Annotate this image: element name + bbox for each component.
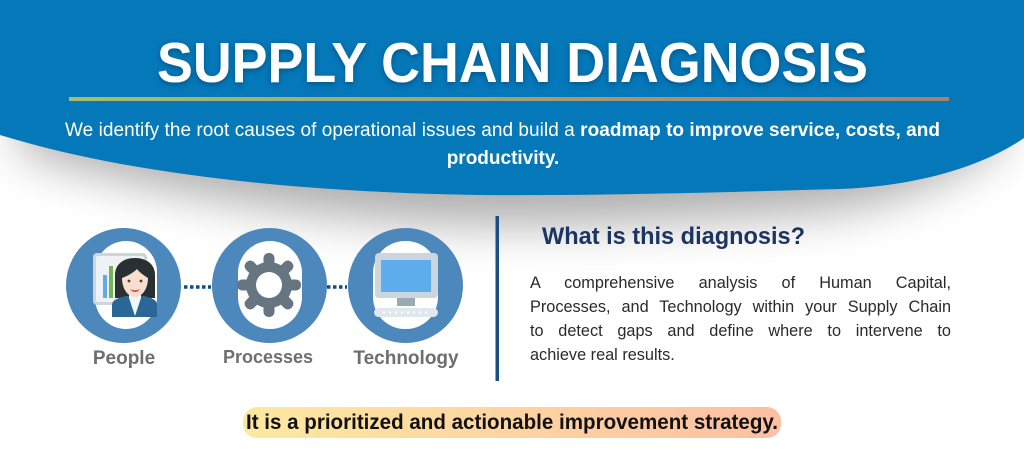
body text: achieve real results. <box>530 346 675 364</box>
people label: People <box>93 348 155 369</box>
technology label: Technology <box>353 348 459 369</box>
title rule <box>69 97 949 101</box>
subtitle <box>65 120 940 169</box>
processes icon <box>212 228 327 343</box>
body text: Processes, and Technology within your Supply Chain <box>530 298 951 316</box>
header banner <box>0 0 1024 195</box>
processes label: Processes <box>223 347 313 367</box>
callout pill: It is a prioritized and actionable improvement strategy. <box>246 411 778 434</box>
technology icon <box>348 228 463 343</box>
body text: to detect gaps and define where to intervene to <box>530 322 951 340</box>
vertical divider <box>496 216 499 381</box>
title: SUPPLY CHAIN DIAGNOSIS <box>157 31 868 95</box>
people icon <box>66 228 181 343</box>
subtitle: productivity. <box>447 148 559 169</box>
body text <box>530 274 951 364</box>
header shadow <box>20 0 1004 224</box>
connector dots: people to processes <box>184 285 211 289</box>
subtitle: We identify the root causes of operational issues and build a roadmap to improve service, costs, and <box>65 120 940 141</box>
connector dots: processes to technology <box>327 285 347 289</box>
body text: A comprehensive analysis of Human Capital, <box>530 274 951 292</box>
section heading: What is this diagnosis? <box>542 223 805 250</box>
